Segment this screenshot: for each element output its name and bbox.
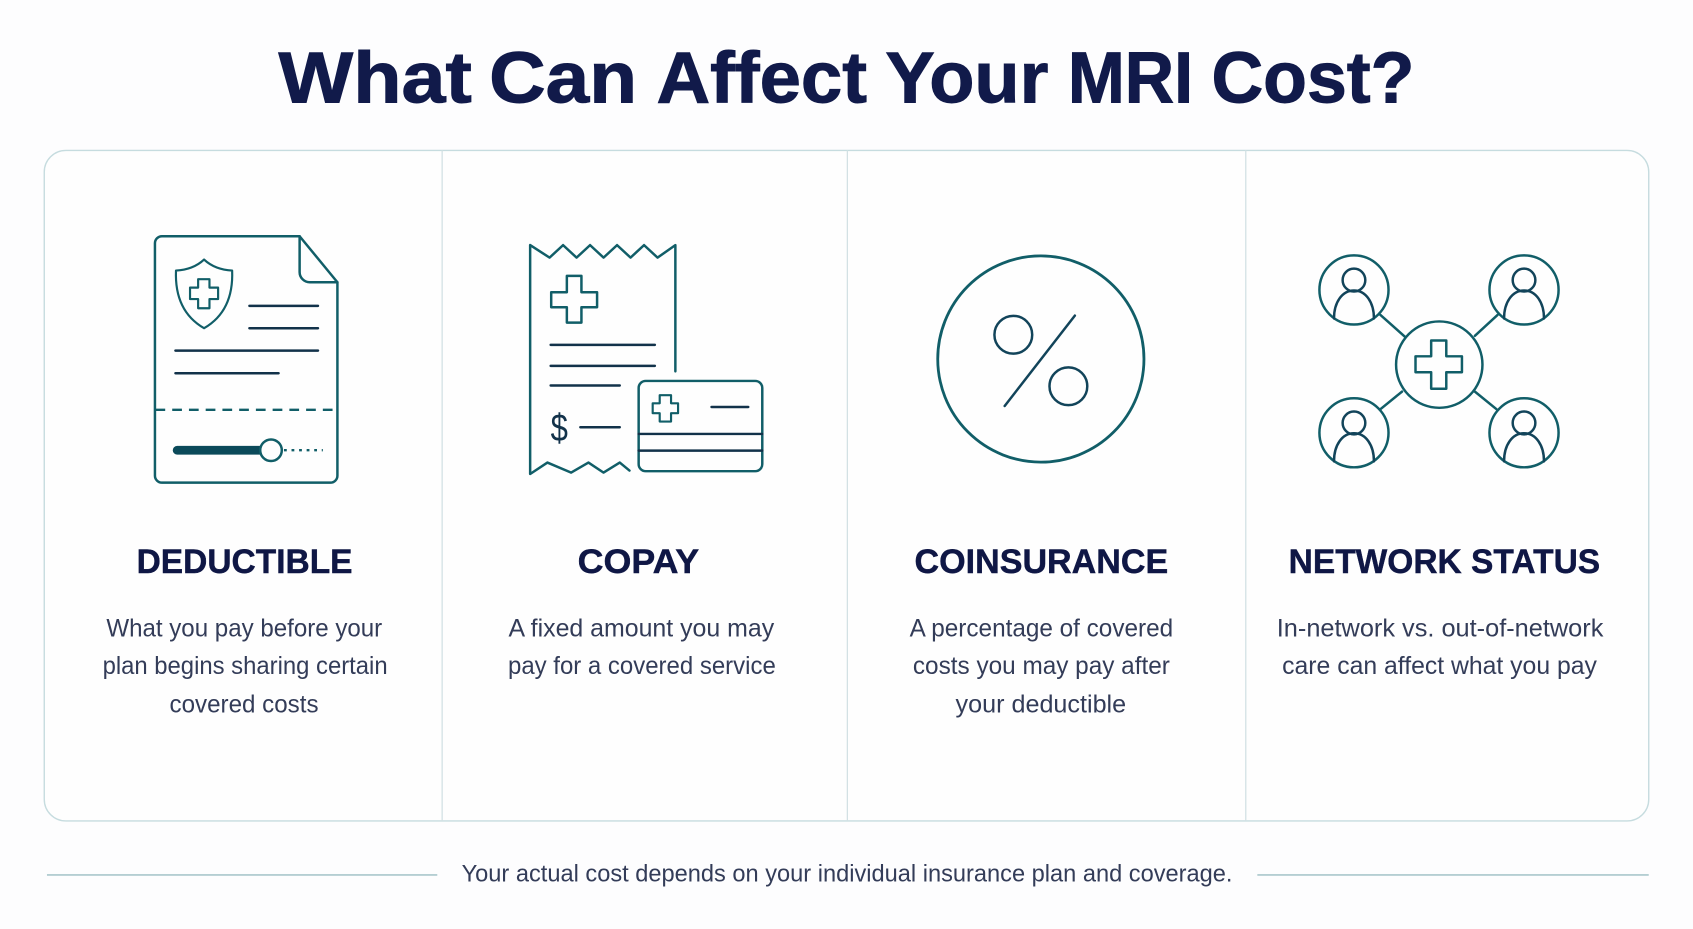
description: coinsurance: costs you may pay after [913,652,1170,680]
description: copay: A fixed amount you may [509,615,774,643]
heading: network status: NETWORK STATUS [1289,543,1600,581]
title: Can [489,39,637,119]
description: deductible: plan begins sharing certain [103,652,388,680]
footer note: Your actual cost depends on your individual insurance plan and coverage. [462,861,1232,888]
description: deductible: What you pay before your [106,615,383,643]
description: network status: care can affect what you pay [1282,652,1597,680]
heading: coinsurance: COINSURANCE [915,543,1168,581]
icon: care network [1319,255,1559,467]
title: Your [885,39,1048,119]
title [279,39,1414,119]
description: coinsurance [910,615,1173,718]
description: copay: pay for a covered service [508,652,776,680]
icon: receipt and insurance card: $ [551,407,568,450]
description: deductible [103,615,388,718]
description: coinsurance: your deductible [956,690,1126,718]
heading: copay: COPAY [578,543,699,581]
panel: network status [1246,150,1649,821]
heading: deductible: DEDUCTIBLE [137,543,353,581]
title: MRI [1068,39,1193,119]
panel: deductible [44,150,442,821]
title: What [279,39,472,119]
description: copay [508,615,776,680]
description: network status: In-network vs. out-of-network [1277,615,1604,643]
title: Cost? [1211,39,1414,119]
description: network status [1277,615,1604,680]
icon: receipt and insurance card [530,245,762,474]
description: coinsurance: A percentage of covered [910,615,1173,643]
description: deductible: covered costs [170,690,319,718]
panel frame [44,150,1649,821]
icon: percent circle [938,256,1144,462]
panel: copay [442,150,847,821]
title: Affect [656,39,867,119]
icon: insurance document [155,236,337,483]
panel: coinsurance [847,150,1246,821]
